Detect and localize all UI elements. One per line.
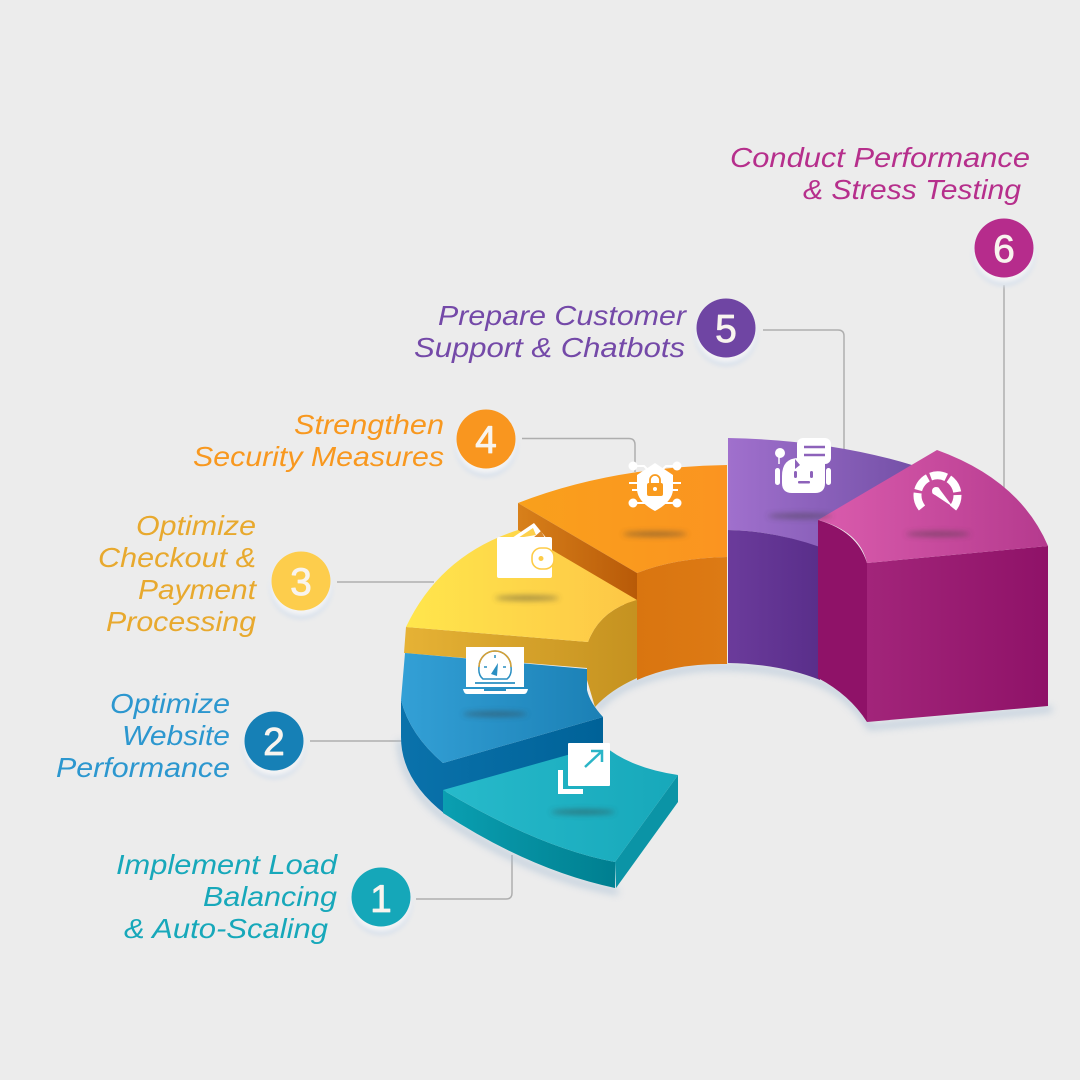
teal top face: [443, 745, 678, 862]
label 3: Payment: [138, 574, 257, 605]
yellow front face: [404, 600, 637, 707]
label 4: Strengthen: [294, 409, 444, 440]
label 6: Conduct Performance: [730, 142, 1030, 173]
icon: gauge: [918, 475, 958, 508]
icon: wallet: [497, 523, 554, 578]
segment 3: yellow: [404, 530, 637, 707]
label 5: [414, 300, 688, 363]
segment 1: teal: [443, 745, 678, 888]
label 6: & Stress Testing: [803, 174, 1021, 205]
segment 5: purple: [728, 438, 912, 680]
magenta top face: [818, 450, 1048, 563]
orange top face: [518, 465, 727, 573]
badge 6: [973, 218, 1035, 286]
blue side face: [401, 700, 603, 814]
badge 3: [270, 552, 332, 619]
teal right face: [615, 775, 678, 888]
label 2: Performance: [56, 752, 230, 783]
badge 6: 6: [993, 228, 1015, 271]
badge 5: [695, 298, 757, 366]
badge 1: 1: [370, 878, 392, 921]
label 3: Optimize: [136, 510, 256, 541]
segment 6: magenta: [818, 450, 1048, 722]
label 3: Checkout &: [98, 542, 256, 573]
magenta front face: [867, 546, 1048, 722]
label 3: Processing: [106, 606, 256, 637]
segment 4: orange: [518, 465, 727, 680]
label 2: Website: [122, 720, 230, 751]
badge 2: 2: [263, 721, 285, 764]
label 1: [116, 849, 339, 944]
label 5: Support & Chatbots: [414, 332, 685, 363]
segment 2: blue: [401, 653, 603, 814]
label 2: [56, 688, 230, 783]
magenta left face: [818, 520, 867, 722]
label 4: Security Measures: [193, 441, 444, 472]
label 3: [98, 510, 257, 637]
icon: security shield: [628, 462, 682, 511]
icon shadows: [463, 514, 970, 814]
badge 4: 4: [475, 419, 497, 462]
badge 5: 5: [715, 308, 737, 351]
badge 4: [455, 410, 517, 477]
label 1: Implement Load: [116, 849, 339, 880]
connector lines: [310, 285, 1004, 899]
purple top face: [728, 438, 912, 547]
label 2: Optimize: [110, 688, 230, 719]
orange front face: [637, 557, 727, 680]
label 1: Balancing: [203, 881, 337, 912]
yellow top face: [406, 530, 637, 642]
ground shadow: [400, 667, 1052, 892]
icon: expand (load balancing): [560, 743, 610, 792]
teal side face: [443, 790, 615, 888]
label 6: [730, 142, 1030, 205]
label 5: Prepare Customer: [438, 300, 688, 331]
orange side face: [518, 503, 637, 612]
badge 2: [243, 712, 305, 779]
badge 1: [350, 868, 412, 935]
badge 3: 3: [290, 561, 312, 604]
label 4: [193, 409, 444, 472]
icon: chatbot: [775, 438, 831, 493]
label 1: & Auto-Scaling: [124, 913, 328, 944]
icon: laptop speedometer: [463, 647, 528, 694]
purple front face: [728, 530, 820, 680]
blue top face: [401, 653, 603, 763]
